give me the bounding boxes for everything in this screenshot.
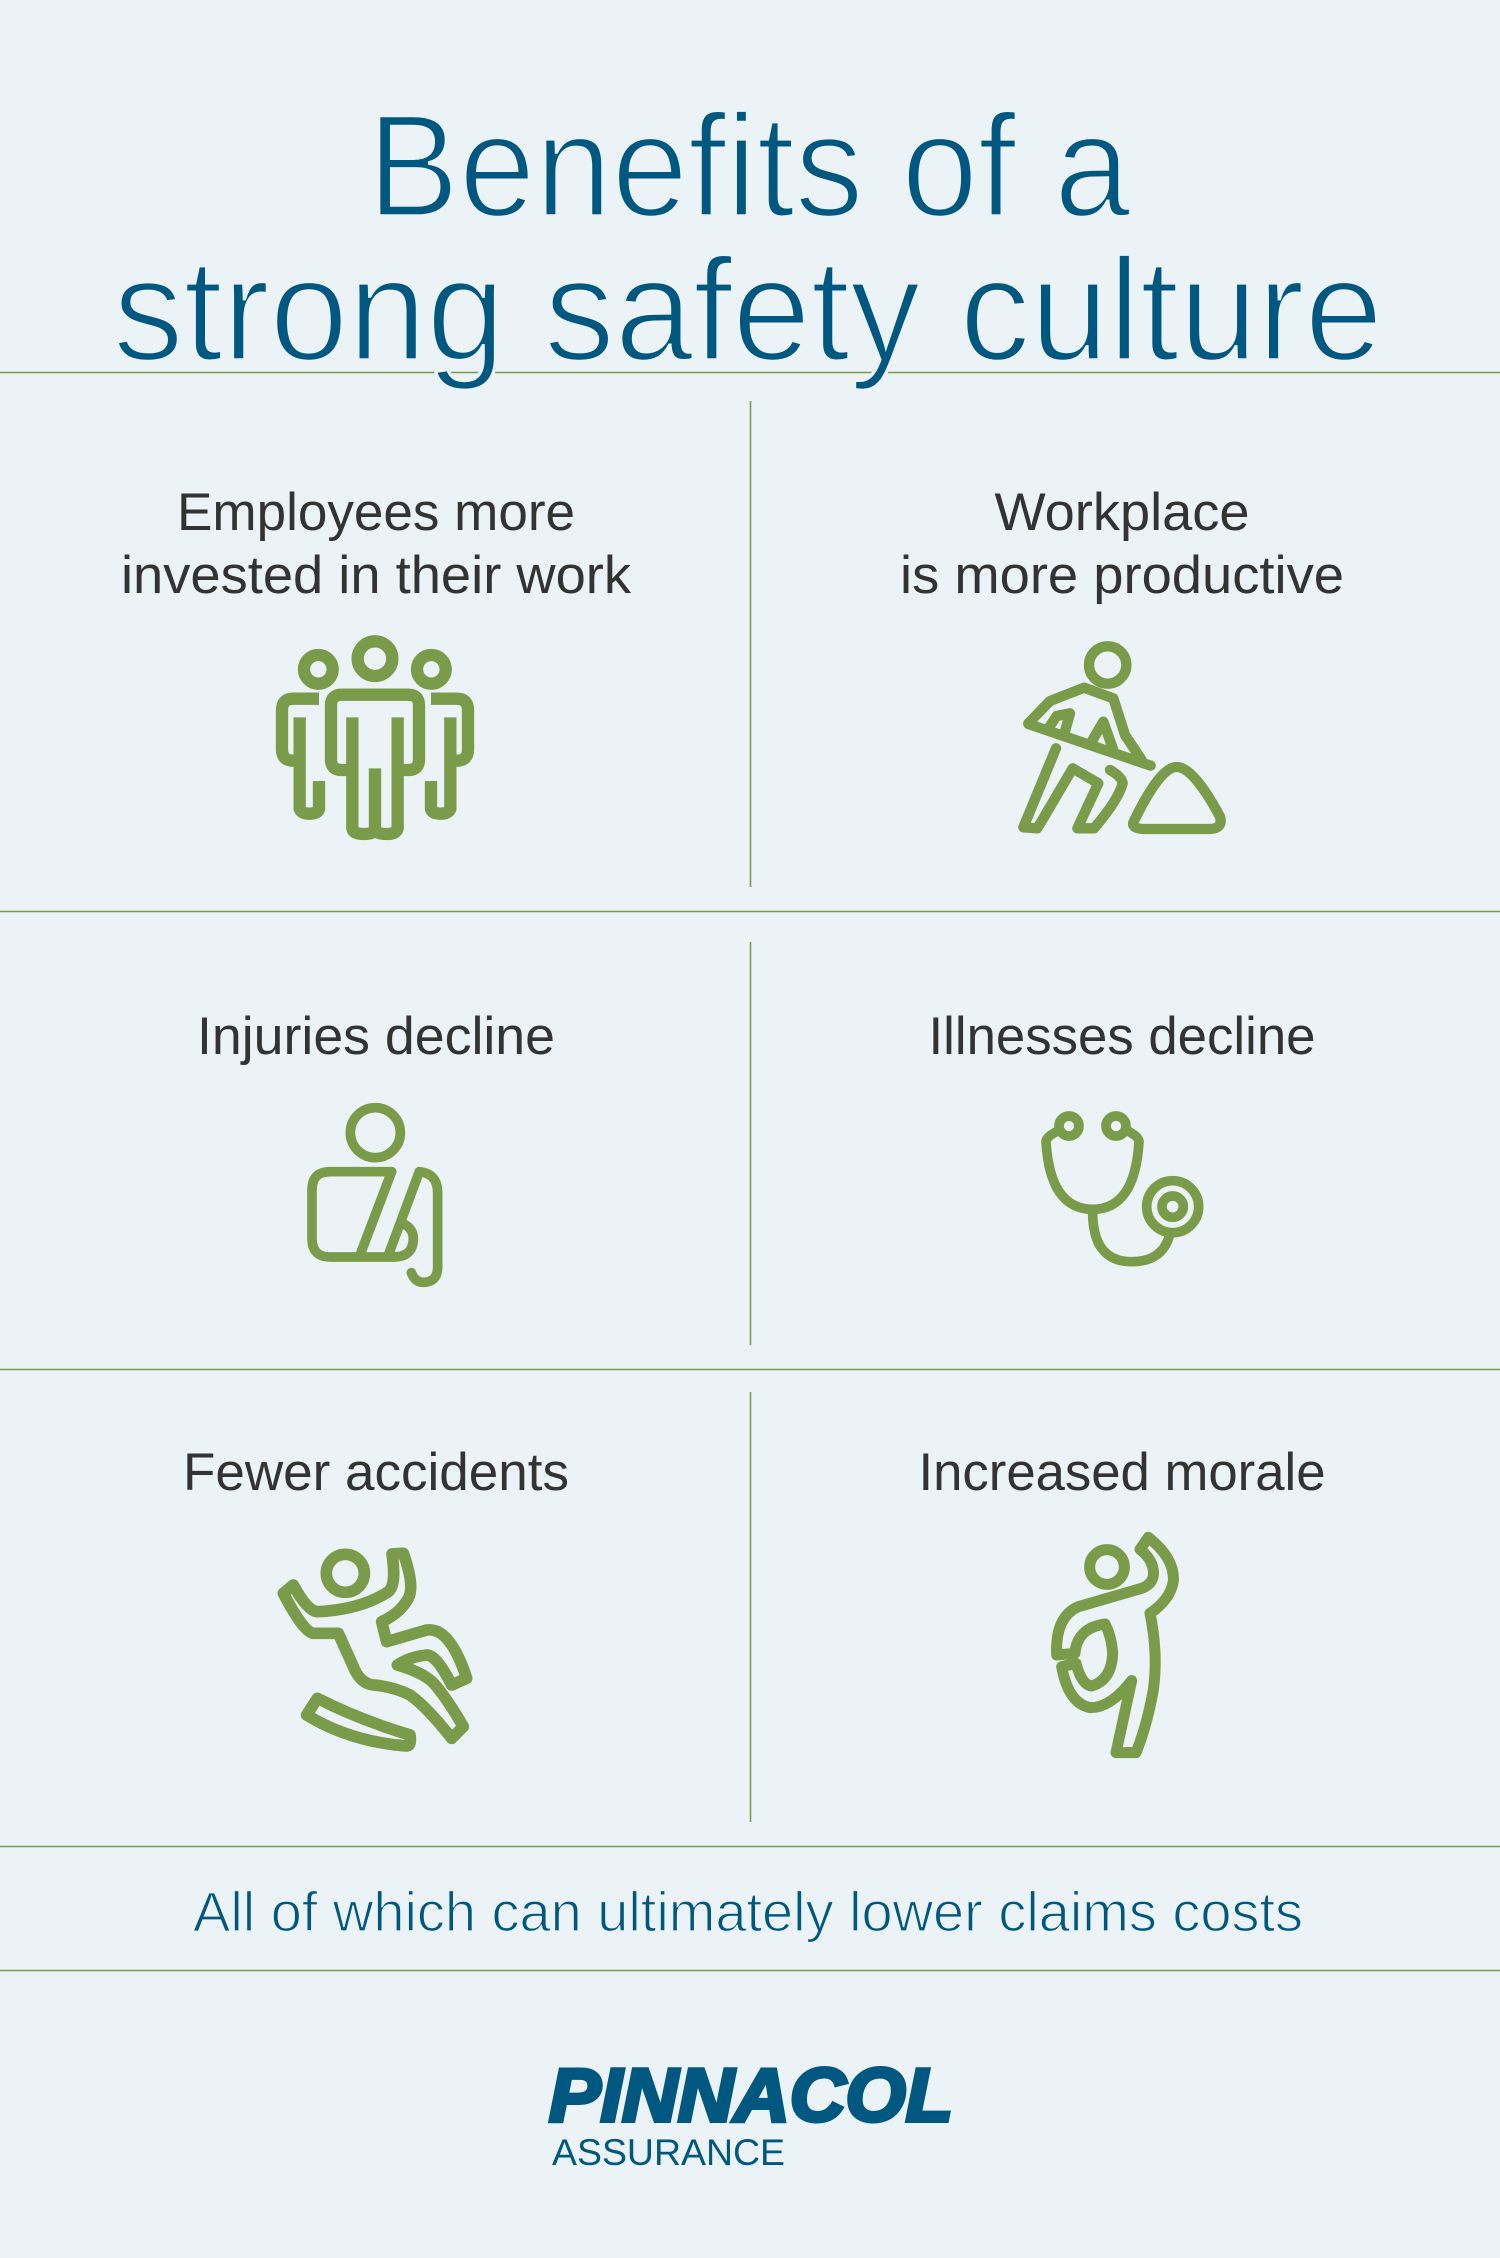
- icon: person with arm sling: [312, 1108, 438, 1282]
- title: [113, 84, 1383, 391]
- panel: increased morale: [918, 1443, 1326, 1753]
- panel: fewer accidents: [183, 1443, 569, 1746]
- icon: person slipping: [283, 1553, 467, 1746]
- icon: worker with shovel: [1023, 646, 1221, 829]
- panel: illnesses decline: [928, 1007, 1316, 1262]
- icon: stethoscope: [1046, 1116, 1199, 1262]
- heading: employees: Employees more: [177, 483, 575, 542]
- heading: morale: Increased morale: [918, 1443, 1326, 1502]
- heading: workplace: Workplace: [994, 483, 1250, 542]
- title: strong safety culture: [113, 228, 1383, 391]
- title: Benefits of a: [368, 84, 1131, 247]
- logo: Pinnacol Assurance: [549, 2053, 953, 2173]
- heading: injuries: Injuries decline: [197, 1007, 555, 1066]
- panel: workplace more productive: [900, 483, 1344, 829]
- panel: injuries decline: [197, 1007, 555, 1282]
- heading: employees: invested in their work: [121, 546, 632, 605]
- icon: person dancing: [1057, 1537, 1173, 1753]
- heading: workplace: [900, 483, 1344, 605]
- heading: employees: [121, 483, 632, 605]
- closing statement: All of which can ultimately lower claims costs: [193, 1880, 1303, 1943]
- heading: illnesses: Illnesses decline: [928, 1007, 1316, 1066]
- logo: Pinnacol Assurance: PINNACOL: [549, 2053, 953, 2137]
- panel: employees more invested: [121, 483, 632, 834]
- logo: Pinnacol Assurance: ASSURANCE: [552, 2132, 785, 2173]
- icon: group of people: [282, 641, 468, 834]
- heading: accidents: Fewer accidents: [183, 1443, 569, 1502]
- heading: workplace: is more productive: [900, 546, 1344, 605]
